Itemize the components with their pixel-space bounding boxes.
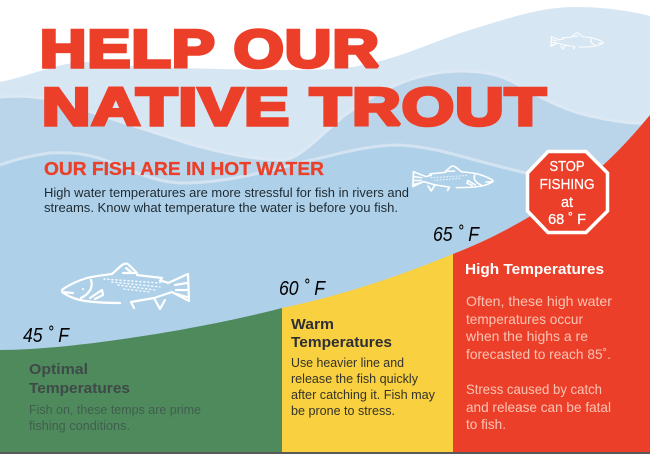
stop sign: at bbox=[561, 195, 573, 211]
optimal temperatures text: Fish on, these temps are prime bbox=[29, 402, 201, 417]
icon: middle trout bbox=[413, 166, 493, 191]
high temperatures text: and release can be fatal bbox=[466, 399, 611, 415]
warm temperatures text: after catching it. Fish may bbox=[291, 387, 435, 402]
high temperatures text: Often, these high water bbox=[466, 293, 612, 309]
intro text: streams. Know what temperature the water is before you fish. bbox=[44, 200, 398, 215]
stop sign: 68 ˚ F bbox=[548, 212, 586, 228]
high temperatures text: High Temperatures bbox=[465, 261, 604, 278]
stop sign: FISHING bbox=[540, 177, 594, 193]
warm temperatures text: be prone to stress. bbox=[291, 403, 395, 418]
label: 45 F: 45 ˚ F bbox=[23, 325, 71, 347]
temperature band: warm (yellow) bbox=[282, 254, 453, 452]
optimal temperatures text bbox=[29, 361, 201, 433]
title bbox=[40, 20, 547, 137]
temperature band: high (red) bbox=[453, 115, 650, 452]
icon: large trout bbox=[62, 264, 189, 309]
intro text: High water temperatures are more stressful for fish in rivers and bbox=[44, 185, 409, 200]
bottom edge line bbox=[0, 452, 650, 454]
optimal temperatures text: Optimal bbox=[29, 361, 88, 378]
high temperatures text bbox=[465, 261, 612, 432]
warm temperatures text: Temperatures bbox=[291, 334, 392, 351]
subheading: OUR FISH ARE IN HOT WATER bbox=[44, 159, 324, 179]
temperature band: optimal (green) bbox=[0, 308, 282, 452]
icon: small distant trout bbox=[551, 33, 603, 49]
stop sign bbox=[528, 152, 608, 232]
high temperatures text: to fish. bbox=[466, 416, 506, 432]
high temperatures text: temperatures occur bbox=[466, 311, 583, 327]
warm temperatures text: Warm bbox=[291, 316, 334, 333]
warm temperatures text bbox=[291, 316, 435, 418]
intro text bbox=[44, 185, 409, 215]
warm temperatures text: Use heavier line and bbox=[291, 355, 404, 370]
warm temperatures text: release the fish quickly bbox=[291, 371, 418, 386]
stop sign: STOP bbox=[550, 159, 584, 175]
high temperatures text: forecasted to reach 85˚. bbox=[466, 346, 611, 362]
water background: lower wave bbox=[0, 145, 650, 454]
high temperatures text: when the highs a re bbox=[465, 328, 588, 344]
high temperatures text: Stress caused by catch bbox=[466, 381, 602, 397]
optimal temperatures text: fishing conditions. bbox=[29, 418, 130, 433]
label: 65 F: 65 ˚ F bbox=[433, 224, 481, 246]
optimal temperatures text: Temperatures bbox=[29, 380, 130, 397]
title: HELP OUR bbox=[40, 20, 380, 79]
label: 60 F: 60 ˚ F bbox=[279, 278, 327, 300]
title: NATIVE TROUT bbox=[42, 78, 547, 137]
